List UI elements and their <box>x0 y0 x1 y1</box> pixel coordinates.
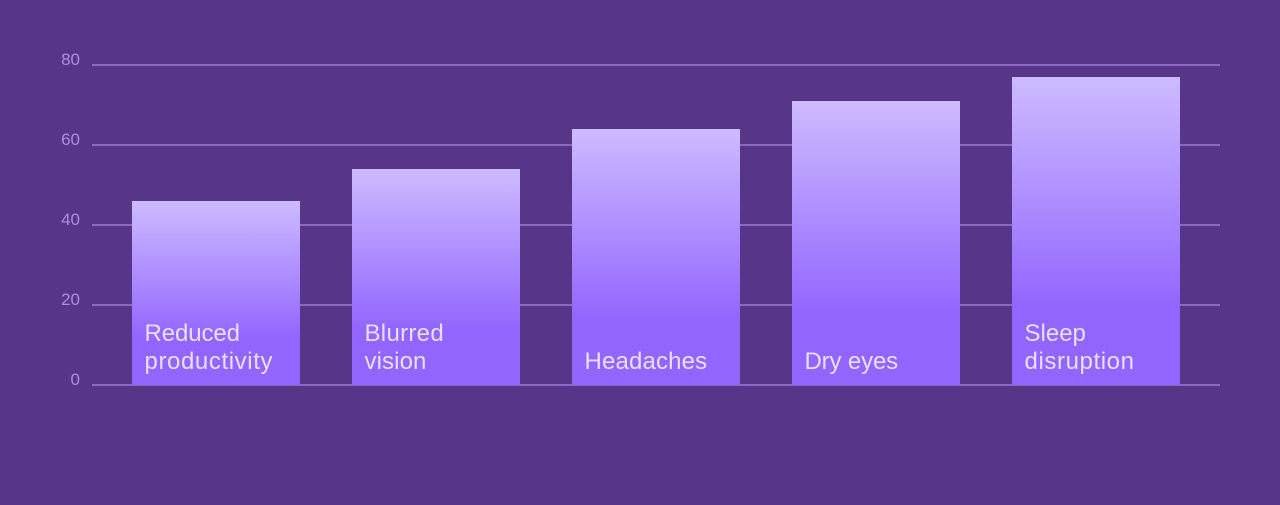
y axis tick 80: 80 <box>61 50 80 69</box>
bar label: Blurred vision <box>364 320 444 375</box>
bar: Sleep disruption <box>1012 77 1180 385</box>
bar label: Reduced productivity: Reduced <box>144 320 240 347</box>
y axis tick 40: 40 <box>61 210 80 229</box>
bar: Headaches <box>572 129 740 385</box>
bar label: Sleep disruption: Sleep <box>1024 320 1086 347</box>
bar label: Blurred vision: vision <box>364 348 426 375</box>
bar: Reduced productivity <box>132 201 300 385</box>
bar label: Reduced productivity: productivity <box>144 348 273 375</box>
bar label: Headaches: Headaches <box>584 348 707 375</box>
y axis tick 20: 20 <box>61 290 80 309</box>
bar: Blurred vision <box>352 169 520 385</box>
bar label: Sleep disruption: disruption <box>1024 348 1135 375</box>
bar label: Reduced productivity <box>144 320 273 375</box>
bar: Dry eyes <box>792 101 960 385</box>
bar label: Blurred vision: Blurred <box>364 320 444 347</box>
y axis tick 60: 60 <box>61 130 80 149</box>
y axis tick 0: 0 <box>71 370 80 389</box>
bar label: Sleep disruption <box>1024 320 1135 375</box>
bar label: Dry eyes: Dry eyes <box>804 348 898 375</box>
